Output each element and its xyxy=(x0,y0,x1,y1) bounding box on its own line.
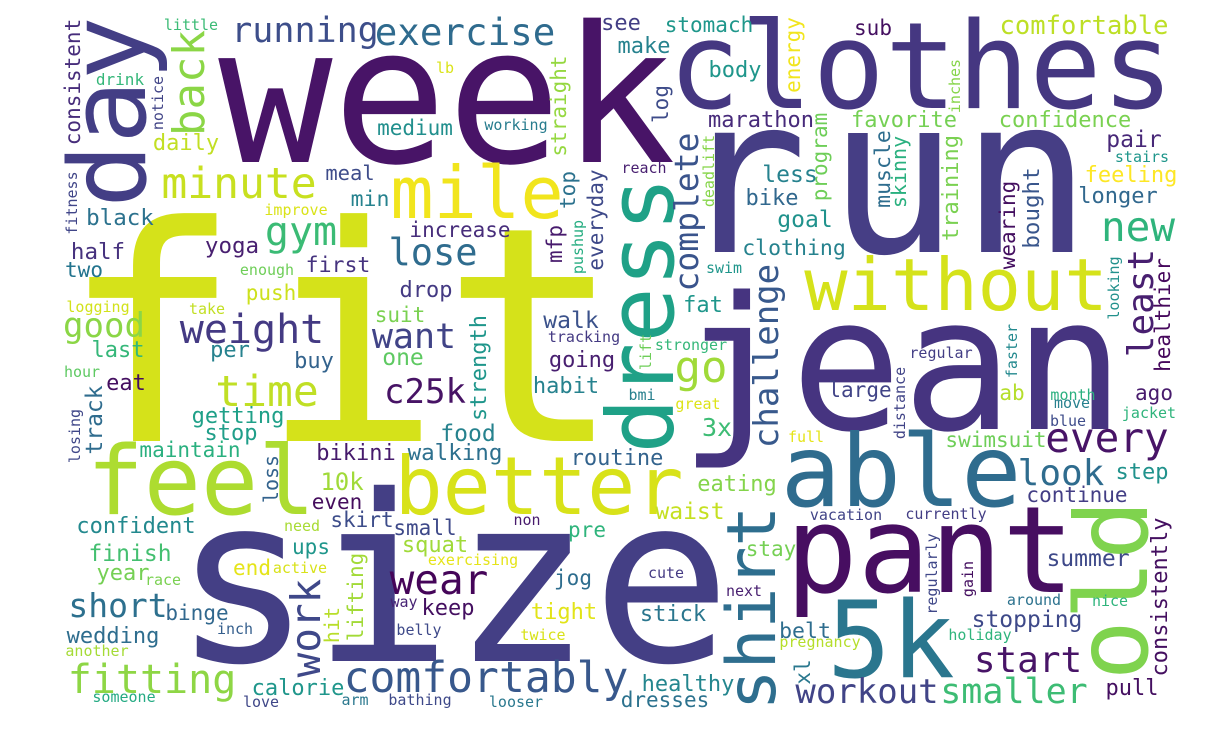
word: goal: goal xyxy=(777,207,833,233)
word: summer: summer xyxy=(1046,546,1130,572)
word: bike: bike xyxy=(746,186,798,211)
word: 3x: 3x xyxy=(702,413,732,442)
word: able: able xyxy=(781,413,1021,530)
word: improve: improve xyxy=(264,201,328,219)
word: food: food xyxy=(440,421,496,447)
word: tight: tight xyxy=(531,600,597,625)
word: energy: energy xyxy=(781,17,805,93)
word: looking: looking xyxy=(1105,256,1123,320)
word: push: push xyxy=(246,281,296,305)
word: pull: pull xyxy=(1106,676,1158,701)
word: program: program xyxy=(808,113,832,201)
word: healthier: healthier xyxy=(1151,258,1175,372)
word: run: run xyxy=(676,51,1092,304)
word: way: way xyxy=(390,593,418,611)
word: binge: binge xyxy=(165,601,229,625)
word: c25k: c25k xyxy=(384,372,466,412)
word: xl: xl xyxy=(791,659,815,685)
word: ago: ago xyxy=(1135,381,1173,405)
word: wedding: wedding xyxy=(67,624,159,649)
word: logging: logging xyxy=(66,298,130,316)
word: finish: finish xyxy=(88,541,172,567)
word: wear: wear xyxy=(390,556,488,604)
word: lifting: lifting xyxy=(344,553,368,641)
word: swimsuit: swimsuit xyxy=(945,428,1047,452)
word: consistent: consistent xyxy=(61,19,85,145)
word: inches: inches xyxy=(946,59,964,113)
word: vacation: vacation xyxy=(810,506,882,524)
word: walking: walking xyxy=(408,440,502,466)
word: make: make xyxy=(618,34,670,59)
word: small: small xyxy=(393,516,457,540)
word: consistently: consistently xyxy=(1148,518,1173,676)
word: work: work xyxy=(282,578,330,677)
word: black: black xyxy=(86,205,154,231)
word: smaller: smaller xyxy=(940,672,1088,712)
word: day: day xyxy=(47,16,170,208)
word: old: old xyxy=(1054,500,1171,680)
word: skirt: skirt xyxy=(330,508,394,532)
word: least: least xyxy=(1121,249,1162,357)
word: month: month xyxy=(1050,386,1096,404)
word: workout: workout xyxy=(795,672,939,712)
word: around: around xyxy=(1007,591,1061,609)
word: routine: routine xyxy=(571,446,663,471)
word: waist: waist xyxy=(655,499,725,525)
word: meal: meal xyxy=(325,161,375,185)
word: blue: blue xyxy=(1050,412,1086,430)
word: pregnancy: pregnancy xyxy=(779,633,861,651)
word: bmi: bmi xyxy=(628,386,656,404)
word: straight: straight xyxy=(547,55,571,157)
word: sub: sub xyxy=(854,16,892,40)
word: feel: feel xyxy=(87,427,315,537)
word: keep: keep xyxy=(422,596,474,621)
word: regular: regular xyxy=(909,344,973,362)
word: clothes: clothes xyxy=(668,0,1174,137)
word: step: step xyxy=(1116,460,1168,485)
word: enough: enough xyxy=(240,261,294,279)
word: large: large xyxy=(828,378,892,402)
word: eating: eating xyxy=(697,472,777,497)
word: even: even xyxy=(312,490,362,514)
word: muscle: muscle xyxy=(871,130,896,208)
word: first: first xyxy=(306,253,370,278)
word: feeling: feeling xyxy=(1085,163,1177,188)
word: top: top xyxy=(556,171,580,209)
word: gain: gain xyxy=(959,561,977,597)
word: holiday: holiday xyxy=(948,626,1012,644)
word: looser: looser xyxy=(489,693,543,711)
word: every: every xyxy=(1045,414,1169,462)
word: stay: stay xyxy=(746,537,796,561)
word: comfortably: comfortably xyxy=(344,653,628,703)
word: someone: someone xyxy=(92,688,156,706)
word: daily: daily xyxy=(153,131,219,156)
word: full: full xyxy=(788,428,824,446)
word: confident: confident xyxy=(76,514,196,539)
word: track: track xyxy=(82,385,108,455)
word: see: see xyxy=(601,11,641,36)
word: habit: habit xyxy=(533,374,599,399)
word: time: time xyxy=(215,367,319,417)
word: body: body xyxy=(709,58,761,83)
word: 10k: 10k xyxy=(320,468,364,496)
word: swim: swim xyxy=(706,259,742,277)
word: notice: notice xyxy=(149,76,167,130)
word: back: back xyxy=(164,30,215,136)
word: drop: drop xyxy=(400,278,452,303)
word: training: training xyxy=(939,135,964,241)
word: dresses: dresses xyxy=(621,688,709,712)
word: jean: jean xyxy=(679,257,1125,473)
word: drink: drink xyxy=(96,70,144,89)
word: getting: getting xyxy=(192,404,284,429)
word: running: running xyxy=(231,11,379,51)
word: jacket: jacket xyxy=(1122,404,1176,422)
word: yoga: yoga xyxy=(205,233,259,259)
word: pant: pant xyxy=(786,482,1074,621)
word: ups: ups xyxy=(292,535,330,559)
word: longer: longer xyxy=(1078,184,1158,209)
word: want: want xyxy=(372,317,456,357)
word: bikini: bikini xyxy=(316,441,396,466)
word: lb: lb xyxy=(436,59,454,77)
word: pushup: pushup xyxy=(569,220,587,274)
word: tracking: tracking xyxy=(548,328,620,346)
word: one: one xyxy=(382,345,424,371)
word: eat: eat xyxy=(106,371,146,396)
word: look: look xyxy=(1018,453,1105,494)
word: short: short xyxy=(68,586,168,625)
word: stick: stick xyxy=(640,602,706,627)
word: 5k: 5k xyxy=(827,579,955,702)
word: another: another xyxy=(65,642,129,660)
word: dress: dress xyxy=(588,177,695,453)
word: fitting: fitting xyxy=(68,657,236,703)
word: everyday: everyday xyxy=(584,169,608,271)
word: exercising: exercising xyxy=(428,551,518,569)
word: take: take xyxy=(189,300,225,318)
word: non: non xyxy=(513,511,541,529)
word: race: race xyxy=(145,571,181,589)
word: arm: arm xyxy=(341,691,369,709)
word: losing: losing xyxy=(66,409,84,463)
word: bathing: bathing xyxy=(388,691,452,709)
word: complete: complete xyxy=(667,133,706,291)
word: clothing: clothing xyxy=(742,236,846,261)
word: suit: suit xyxy=(375,303,425,327)
word: move: move xyxy=(1054,394,1090,412)
word: stomach: stomach xyxy=(665,13,753,37)
word: better: better xyxy=(395,440,683,533)
word: favorite: favorite xyxy=(851,108,957,133)
word: regularly: regularly xyxy=(923,533,941,615)
word: gym: gym xyxy=(265,209,337,255)
word: weight: weight xyxy=(180,307,324,353)
word: comfortable: comfortable xyxy=(1000,11,1168,41)
word: healthy: healthy xyxy=(642,672,734,697)
word: end: end xyxy=(233,556,271,580)
word: buy: buy xyxy=(294,349,334,374)
word: go: go xyxy=(675,342,727,393)
word: pair: pair xyxy=(1106,127,1162,153)
word: log: log xyxy=(649,85,673,123)
word: belly: belly xyxy=(396,621,442,639)
word: fit: fit xyxy=(61,163,622,512)
word: reach: reach xyxy=(621,159,667,177)
word: per: per xyxy=(210,338,250,363)
word: increase: increase xyxy=(409,218,511,242)
word: distance: distance xyxy=(891,367,909,439)
word: skinny: skinny xyxy=(887,136,911,208)
word: lose: lose xyxy=(388,231,478,274)
word: minute: minute xyxy=(161,159,317,209)
word: wearing: wearing xyxy=(996,181,1020,269)
word: without: without xyxy=(804,243,1108,327)
word: fat: fat xyxy=(683,293,723,318)
word: medium: medium xyxy=(377,116,453,140)
word: start: start xyxy=(974,640,1082,681)
word: less: less xyxy=(762,162,818,188)
word: mfp: mfp xyxy=(543,225,567,263)
word: exercise: exercise xyxy=(375,10,555,54)
word: inch: inch xyxy=(217,620,253,638)
word: calorie: calorie xyxy=(252,676,344,701)
word: mile: mile xyxy=(390,151,564,235)
word: stop: stop xyxy=(205,421,257,446)
word: active: active xyxy=(273,559,327,577)
word: working: working xyxy=(484,116,548,134)
word: continue: continue xyxy=(1026,483,1128,507)
word: size: size xyxy=(173,446,731,716)
word: nice: nice xyxy=(1092,592,1128,610)
word: faster: faster xyxy=(1003,324,1021,378)
word: confidence: confidence xyxy=(999,108,1131,133)
word: deadlift: deadlift xyxy=(700,135,718,207)
word: last: last xyxy=(92,338,144,363)
word: walk: walk xyxy=(543,308,599,334)
word: ab: ab xyxy=(999,381,1025,405)
word: min: min xyxy=(351,187,389,212)
word: belt: belt xyxy=(779,619,831,644)
word: stopping: stopping xyxy=(972,607,1082,633)
word: cute: cute xyxy=(648,564,684,582)
word: fitness: fitness xyxy=(63,171,81,235)
word: stairs: stairs xyxy=(1115,148,1169,166)
word: stronger: stronger xyxy=(655,336,727,354)
word: jog: jog xyxy=(554,566,592,590)
word: pre: pre xyxy=(568,518,606,542)
word: two: two xyxy=(65,258,103,282)
word: shirt: shirt xyxy=(713,506,792,710)
word: new: new xyxy=(1101,203,1175,251)
word: next: next xyxy=(726,582,762,600)
word: great: great xyxy=(675,395,721,413)
word: going: going xyxy=(549,348,615,373)
word: year: year xyxy=(97,561,149,586)
word: twice: twice xyxy=(520,626,566,644)
word: hit: hit xyxy=(320,607,344,643)
word: half: half xyxy=(71,239,125,265)
word: maintain: maintain xyxy=(139,438,241,462)
word: love: love xyxy=(243,693,279,711)
word: loss: loss xyxy=(259,455,283,503)
word: need: need xyxy=(284,517,320,535)
word: lift: lift xyxy=(637,334,655,370)
word: strength: strength xyxy=(467,315,492,421)
word: bought: bought xyxy=(1019,167,1045,249)
word: little: little xyxy=(164,16,218,34)
word: marathon: marathon xyxy=(708,108,814,133)
word: currently: currently xyxy=(905,505,987,523)
word: squat: squat xyxy=(402,533,468,558)
word: hour: hour xyxy=(64,363,100,381)
word: challenge: challenge xyxy=(747,264,787,448)
word: good: good xyxy=(63,306,145,346)
